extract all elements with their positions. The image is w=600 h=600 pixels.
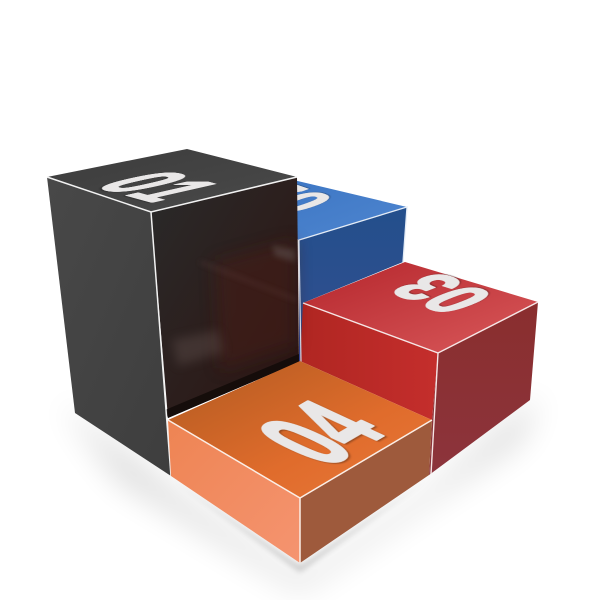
red edges [303, 302, 538, 353]
red right face [429, 302, 538, 475]
black edges [47, 177, 297, 212]
blue top face [240, 178, 407, 240]
black right face [151, 177, 299, 418]
ground shadow [60, 395, 540, 590]
black left face [47, 177, 171, 476]
orange right face [300, 420, 432, 563]
label 02: 02 [225, 175, 351, 219]
reflection on black face [165, 240, 299, 418]
block: orange 04 [168, 361, 432, 563]
black top face [47, 149, 297, 212]
blue edge [299, 207, 407, 262]
label 01: 01 [71, 165, 246, 208]
block: blue 02 [225, 175, 407, 362]
label 03: 03 [371, 265, 513, 321]
orange top face [168, 361, 432, 498]
label 04: 04 [231, 388, 412, 479]
orange left face [168, 420, 300, 563]
red top face [303, 262, 538, 353]
block: black 01 [47, 149, 301, 476]
blue right face [299, 207, 407, 362]
red left face [300, 303, 438, 420]
block: red 03 [300, 262, 538, 475]
orange edges [168, 420, 432, 498]
